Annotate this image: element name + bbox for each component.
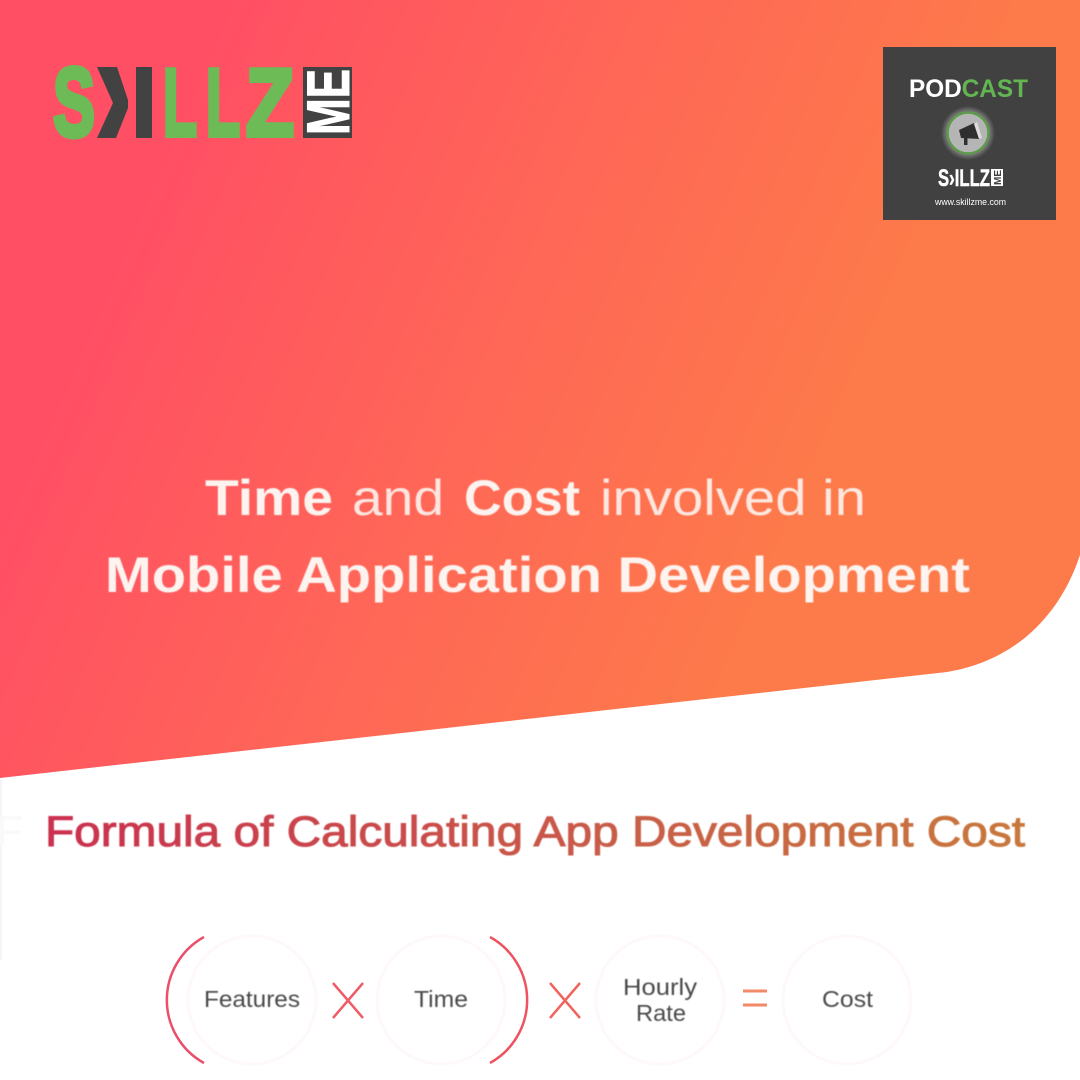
icon: megaphone xyxy=(941,106,995,160)
podcast badge xyxy=(883,47,1056,220)
logo: SKILLZ ME: L xyxy=(206,50,240,156)
hourly rate label: Hourly xyxy=(623,974,698,1000)
right bracket xyxy=(490,937,527,1063)
logo: SKILLZ ME: S xyxy=(53,47,95,157)
title: Time xyxy=(205,470,333,526)
multiply sign 1 xyxy=(333,983,363,1018)
formula equation xyxy=(167,936,911,1064)
faint circles xyxy=(188,936,911,1064)
cost label: Cost xyxy=(822,986,874,1012)
gradient header panel xyxy=(0,0,1080,778)
logo: SKILLZ ME: ME xyxy=(295,69,362,135)
formula heading: Formula of Calculating App Development Cost xyxy=(45,808,1025,856)
title: Cost xyxy=(464,470,580,526)
left bracket xyxy=(167,937,204,1063)
podcast url: www.skillzme.com xyxy=(934,197,1006,207)
podcast label: PODCAST xyxy=(909,75,1028,103)
title xyxy=(105,470,970,603)
logo chevron xyxy=(97,67,128,138)
logo: SKILLZ ME: Z xyxy=(246,50,294,156)
logo: SKILLZ ME: L xyxy=(163,50,197,156)
logo: SKILLZ ME xyxy=(53,47,362,157)
equals sign xyxy=(743,991,767,1005)
multiply sign 2 xyxy=(550,983,580,1018)
hourly rate label xyxy=(623,974,698,1026)
title: involved in xyxy=(600,470,866,526)
time label: Time xyxy=(414,986,468,1012)
hourly rate label: Rate xyxy=(636,1000,686,1026)
small logo: S›ILLZ xyxy=(938,165,990,192)
title: and xyxy=(352,470,444,526)
small logo: ME xyxy=(993,170,1004,185)
features label: Features xyxy=(204,986,300,1012)
title: Mobile Application Development xyxy=(105,547,970,603)
